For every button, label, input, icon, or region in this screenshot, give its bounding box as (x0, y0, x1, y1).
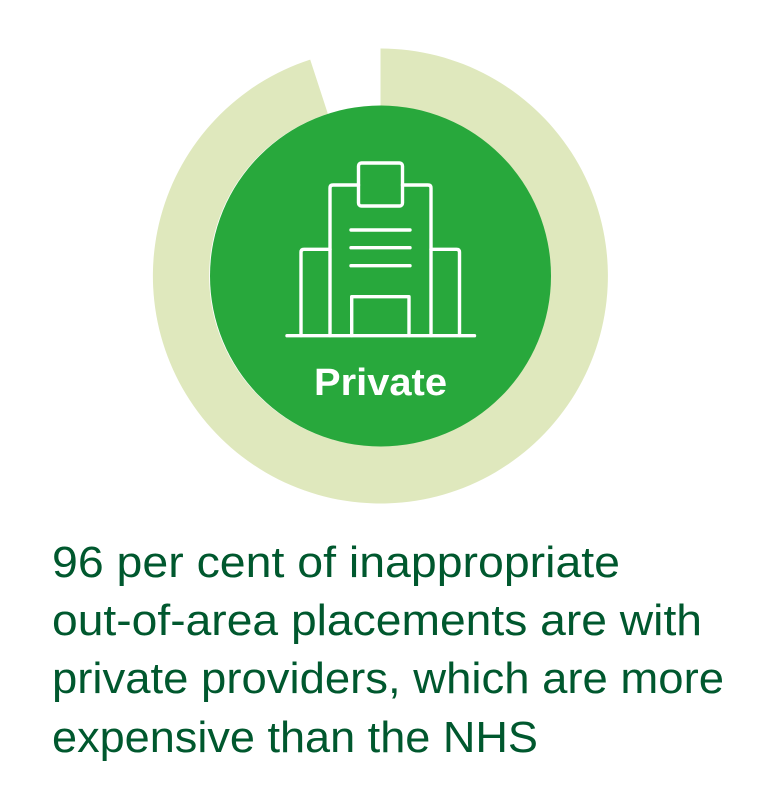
label: Private: Private (314, 362, 447, 404)
icon: hospital building (287, 163, 474, 336)
caption text: out-of-area placements are with (52, 596, 702, 645)
donut ring: 95 per cent arc (153, 48, 608, 503)
caption text (52, 538, 724, 762)
central green circle (210, 106, 551, 446)
caption text: private providers, which are more (52, 654, 724, 703)
caption text: expensive than the NHS (52, 713, 538, 762)
caption text: 96 per cent of inappropriate (52, 538, 620, 587)
